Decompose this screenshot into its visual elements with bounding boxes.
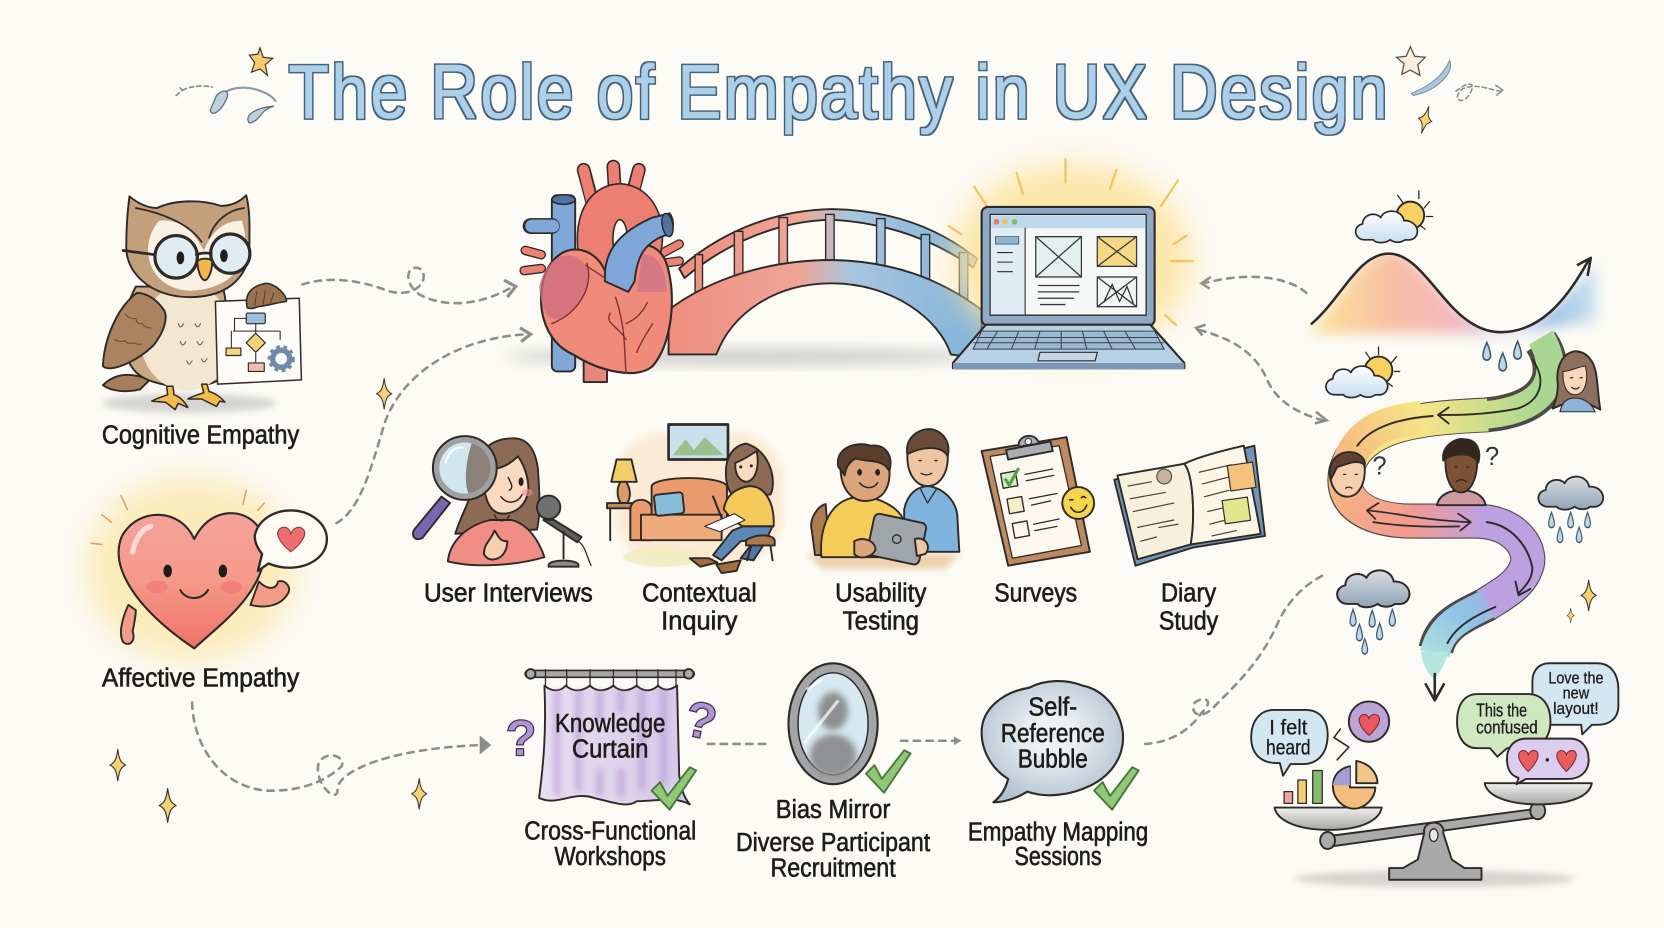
sparkles [110,378,1596,822]
label: cross-functional workshops: Cross-Functional [524,817,696,845]
icon: self-reference bubble: Reference [1001,720,1105,748]
arrow: bubble to river [1145,574,1325,744]
icon: glowing laptop [949,159,1193,369]
label: usability testing [835,580,927,635]
arrow: wave to laptop [1201,277,1306,293]
label: diverse participant recruitment [736,829,930,883]
icon: person right with question [1437,439,1499,505]
icon: upper rain cloud [1538,477,1603,542]
label: diary study [1159,580,1219,635]
label: contextual inquiry [642,580,757,635]
icon: owl with flowchart [102,195,301,413]
speech bubble: I felt heard: I felt [1269,716,1308,739]
label: contextual inquiry: Inquiry [661,607,738,635]
arrow: affective to heart [336,328,531,523]
speech bubble: love the new layout: layout! [1553,699,1599,718]
icon: feedback charts [1284,701,1389,809]
label: diverse participant recruitment: Recruitment [770,855,896,883]
speech bubble: love the new layout [1532,663,1618,734]
label: empathy mapping sessions: Sessions [1015,843,1102,871]
icon: balance scale [1275,783,1592,887]
label: contextual inquiry: Contextual [642,580,757,608]
icon: downward arrow [1425,673,1444,700]
icon: check curtain [652,767,696,810]
icon: usability testing [807,429,960,569]
label: empathy mapping sessions: Empathy Mapping [968,818,1148,846]
icon: self-reference bubble: Bubble [1018,745,1088,773]
label: empathy mapping sessions [968,818,1148,871]
icon: user interviews [413,436,591,567]
icon: check mirror [866,750,911,793]
label: user interviews: User Interviews [424,580,593,608]
icon: teardrops [1483,341,1521,371]
arrow: curtain to mirror [708,743,766,745]
speech bubble: I felt heard [1251,710,1328,776]
icon: smiling heart [87,478,327,660]
icon: question marks [506,689,722,767]
icon: person left with question [1330,452,1387,497]
arrow: laptop to river two-way [1196,325,1327,423]
speech bubble: love the new layout: Love the [1548,668,1604,687]
icon: check bubble [1094,767,1139,810]
icon: diary book [1114,446,1265,566]
icon: question marks: ? [506,710,537,767]
speech bubble: I felt heard: heard [1266,737,1311,760]
title: The Role of Empathy in UX Design [289,49,1387,135]
label: knowledge curtain: Knowledge [555,710,665,738]
title decoration right [1397,47,1503,135]
icon: self-reference bubble: Self- [1028,693,1077,721]
label: knowledge curtain [555,710,665,764]
icon: woman on path [1553,351,1600,412]
label: knowledge curtain: Curtain [572,736,648,764]
icon: surveys clipboard [982,436,1094,566]
speech bubble: this the confused: confused [1476,717,1538,737]
icon: question marks: ? [680,689,722,752]
label: usability testing: Testing [843,607,919,635]
label: surveys: Surveys [994,580,1077,608]
arrow: mirror to bubble [901,736,961,745]
title decoration left [176,48,276,123]
speech bubble: hearts [1507,739,1589,784]
label: cross-functional workshops: Workshops [554,843,666,871]
icon: heart and bridge [504,167,982,382]
speech bubble: this the confused: This the [1476,700,1527,720]
icon: bias mirror [788,663,878,784]
icon: emotion wave [1312,250,1595,333]
icon: person left with question: ? [1373,452,1387,480]
speech bubble: this the confused [1457,694,1550,757]
icon: journey river [1345,337,1550,679]
icon: person right with question: ? [1485,443,1499,471]
label: usability testing: Usability [835,580,927,608]
label: diary study: Diary [1161,580,1216,608]
arrow: cognitive to heart [302,268,516,303]
icon: lower rain cloud [1337,570,1409,654]
label: bias mirror: Bias Mirror [776,796,891,824]
icon: knowledge curtain [526,669,694,804]
icon: self-reference bubble [982,681,1123,802]
speech bubble: love the new layout: new [1563,683,1590,702]
label: affective empathy: Affective Empathy [102,665,300,693]
icon: lower sun cloud [1326,347,1400,398]
icon: contextual inquiry [607,424,783,573]
label: cognitive empathy: Cognitive Empathy [102,422,300,450]
label: cross-functional workshops [524,817,696,871]
icon: upper sun cloud [1356,191,1433,243]
label: diverse participant recruitment: Diverse Participant [736,829,930,857]
arrow: affective to curtain [192,703,491,795]
label: diary study: Study [1159,607,1219,635]
